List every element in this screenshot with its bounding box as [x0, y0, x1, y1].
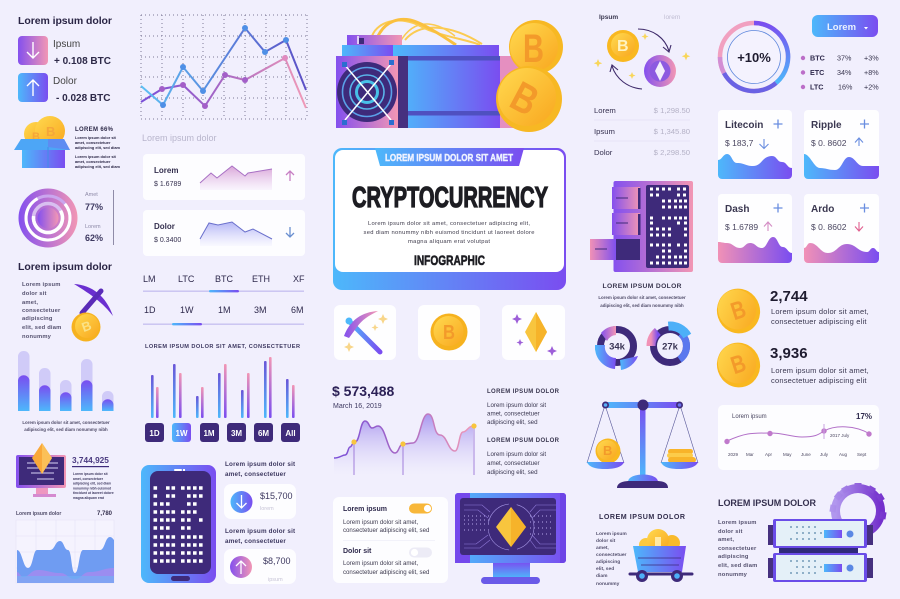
wires — [372, 21, 482, 45]
text: dolor value — [53, 76, 110, 104]
text block: server section: dolor sit — [718, 529, 743, 535]
text block: cart description — [596, 531, 627, 587]
heading: gray subtitle: Lorem ipsum dolor — [142, 133, 217, 143]
panel: toggles: Dolor sit — [343, 548, 372, 555]
subtitle: INFOGRAPHIC — [414, 252, 485, 268]
buttons: range selector: 6M — [258, 429, 269, 438]
text block: mining description: amet, — [22, 300, 38, 306]
text block: lorem 66%: LOREM 66% — [75, 127, 114, 133]
text block: right of value chart: amet, consectetuer — [487, 410, 540, 418]
icon: exchange diagram: B — [617, 38, 629, 55]
illustration: mining rig with coins — [336, 19, 563, 132]
icon: open box with coins: B — [32, 131, 40, 143]
icon: exchange diagram — [594, 29, 690, 89]
panel: toggles: consectetuer adipiscing elit, sed — [343, 527, 429, 534]
text block: cart description: diam — [596, 573, 608, 579]
text: phone note one: Lorem ipsum dolor sit — [225, 461, 296, 468]
tabs: currencies: LTC — [178, 274, 195, 284]
text block: right of value chart: amet, consectetuer — [487, 460, 540, 467]
main title: CRYPTOCURRENCY — [352, 182, 548, 214]
card: 8,700 — [224, 549, 296, 584]
labels: exchange: lorem — [664, 14, 680, 21]
button: lorem dropdown — [812, 15, 878, 37]
text block: right of value chart: LOREM IPSUM DOLOR — [487, 389, 560, 395]
icon: gear — [830, 483, 886, 534]
card: 15,700: $15,700 — [260, 491, 293, 501]
stat: 3,744,925: magna aliquam erat — [73, 496, 105, 500]
button: lorem dropdown: Lorem — [827, 22, 856, 33]
card: timeline chart: July — [820, 452, 829, 457]
series: blue line — [141, 25, 306, 108]
stat: 3,744,925 — [72, 455, 114, 500]
chart: concentric ring gauge — [17, 187, 79, 249]
tabs: timeframes: 6M — [291, 305, 304, 315]
card: litecoin: $ 183,7 — [725, 138, 754, 148]
text block: right of value chart: Lorem ipsum dolor sit — [487, 402, 546, 409]
text block: right of value chart: Lorem ipsum dolor sit — [487, 451, 546, 458]
text block: server section: amet, — [718, 537, 734, 543]
illustration: server stack — [768, 519, 873, 582]
server unit bottom — [773, 553, 867, 582]
text block: cart description: nonummy — [596, 582, 620, 587]
card: dash: $ 1.6789 — [725, 222, 758, 232]
chart: donut 27k — [651, 326, 687, 362]
legend: coin shares: BTC — [810, 54, 825, 62]
panel: BTC balance rows — [18, 36, 111, 104]
toggle on — [409, 504, 432, 514]
text block: server section: adipiscing — [718, 554, 749, 560]
stat: 3,744,925: tincidunt ut laoreet dolore — [73, 491, 114, 495]
legend: coin shares: 16% — [838, 82, 853, 92]
icon: tilted coin: B — [727, 349, 749, 380]
bar chart: capsule bars — [18, 351, 114, 411]
legend: coin shares: ETC — [810, 68, 824, 77]
icon: pickaxe with coin — [72, 284, 113, 342]
table: prices: Ipsum — [594, 127, 615, 136]
text: gauge percentages: Lorem — [85, 224, 101, 230]
card: litecoin — [718, 110, 792, 179]
card: timeline chart: 2017 July — [830, 433, 850, 438]
tabs: currencies: XF — [293, 274, 305, 284]
card: timeline chart: Mar — [746, 452, 754, 457]
text: phone note two — [225, 528, 296, 545]
text block: lorem 66% — [75, 127, 121, 169]
icon tile: coin — [418, 305, 480, 360]
text block: right of value chart — [487, 389, 560, 476]
text block: server section: elit, sed diam — [718, 563, 758, 569]
tabs: timeframes — [143, 305, 304, 325]
card: ripple: Ripple — [811, 120, 842, 131]
coin stat: 3,936: 3,936 — [770, 345, 808, 362]
tabs: timeframes: 1M — [218, 305, 231, 315]
text block: server section: consectetuer — [718, 546, 757, 552]
table: prices: $ 1,345.80 — [654, 127, 690, 136]
panel: toggles: Lorem ipsum dolor sit amet, — [343, 560, 418, 567]
panel: toggles: Lorem ipsum dolor sit amet, — [343, 519, 418, 526]
card: timeline chart: June — [801, 452, 811, 457]
chart: area chart 7,780: 7,780 — [97, 511, 113, 517]
text: dolor value: Dolor — [53, 76, 78, 87]
coin stat: 2,744: 2,744 — [770, 288, 808, 305]
text block: server caption: Lorem ipsum dolor sit amet, consectetuer — [598, 295, 686, 300]
buttons: range selector: 1W — [176, 429, 188, 438]
card: ripple — [804, 110, 879, 179]
buttons: range selector: All — [285, 429, 296, 438]
text: bar chart caption: Lorem ipsum dolor sit amet, consectetuer — [22, 420, 110, 425]
circuit traces — [464, 504, 556, 550]
text block: lorem 66%: Lorem ipsum dolor sit — [75, 135, 117, 140]
icon tile: coin: B — [443, 322, 455, 344]
stat: total value — [332, 383, 394, 410]
coin: front: B — [503, 72, 546, 125]
coin stat: 3,936 — [711, 337, 869, 393]
tabs: timeframes: 1W — [180, 305, 194, 315]
table: prices: $ 2,298.50 — [654, 148, 690, 157]
toggle off — [409, 548, 432, 558]
chart: donut 34k — [595, 326, 638, 370]
coin: front — [496, 66, 562, 132]
legend: coin shares: 34% — [837, 68, 852, 77]
text block: right of value chart: adipiscing elit, sed — [487, 469, 538, 476]
labels: exchange — [599, 14, 680, 21]
card: timeline chart: Sept — [857, 452, 867, 457]
text block: mining description: consectetuer — [22, 308, 61, 314]
card: 8,700: $8,700 — [263, 556, 291, 566]
text block: server caption — [598, 283, 686, 308]
card: dolor sparkline: $ 0.3400 — [154, 237, 181, 244]
legend: coin shares: 37% — [837, 54, 852, 62]
legend: coin shares: +2% — [864, 82, 879, 92]
buttons: range selector: 3M — [231, 429, 242, 438]
coin stat: 2,744: consectetuer adipiscing elit — [771, 317, 867, 326]
text block: mining description: elit, sed diam — [22, 325, 62, 331]
card: 15,700 — [224, 484, 296, 519]
text block: server section: Lorem ipsum — [718, 520, 757, 526]
bar chart: paired thin bars — [151, 357, 295, 418]
tabs: currencies — [143, 274, 305, 292]
text: ipsum value: Ipsum — [53, 39, 80, 50]
text block: server section — [718, 520, 758, 578]
table: prices: Lorem — [594, 106, 616, 115]
text block: lorem 66%: Lorem ipsum dolor sit — [75, 154, 117, 159]
icon: down arrow tile — [18, 36, 48, 65]
card: dash — [718, 194, 792, 263]
text block: right of value chart: adipiscing elit, sed — [487, 419, 538, 426]
card: 8,700: ipsum — [268, 577, 283, 583]
illustration: balance scale — [587, 400, 698, 488]
card: dolor sparkline — [143, 210, 305, 256]
chart: value area chart — [334, 414, 477, 475]
stat: 3,744,925: 3,744,925 — [72, 455, 109, 465]
text: phone note one — [225, 461, 296, 478]
text block: server caption: adipiscing elit, sed diam nonummy nibh — [600, 303, 684, 308]
coin stat: 2,744 — [711, 283, 869, 339]
icon: phone with pixel grid — [141, 465, 216, 583]
table: prices: $ 1,298.50 — [654, 106, 690, 115]
text: ipsum value — [53, 39, 111, 67]
text block: lorem 66%: adipiscing elit, sed diam — [75, 164, 121, 169]
text block: mining description: nonummy — [22, 334, 52, 340]
card: dolor sparkline: Dolor — [154, 222, 175, 231]
text: phone note one: amet, consectetuer — [225, 471, 286, 478]
text: ipsum value: + 0.108 BTC — [54, 56, 111, 67]
description: magna aliquam erat volutpat — [408, 239, 490, 245]
card: timeline chart: 17% — [856, 412, 872, 421]
text: gauge percentages: 62% — [85, 233, 103, 243]
text: dolor value: - 0.028 BTC — [56, 93, 110, 104]
icon: monitor with diamond — [16, 443, 66, 497]
heading: mining: Lorem ipsum dolor — [18, 261, 112, 273]
text block: cart description: elit, sed — [596, 566, 614, 572]
coin stat: 3,936: Lorem ipsum dolor sit amet, — [771, 366, 869, 375]
text block: mining description: adipiscing — [22, 316, 53, 322]
icon: tilted coin — [711, 283, 766, 339]
top box — [347, 35, 402, 45]
tabs: currencies: ETH — [252, 274, 270, 284]
icon: mine cart with coins — [630, 529, 692, 582]
text block: lorem 66%: amet, consectetuer — [75, 140, 111, 145]
card: timeline chart — [718, 405, 879, 470]
card: timeline chart: 2029 — [728, 452, 739, 457]
text block: server section: nonummy — [718, 572, 748, 578]
card: ardo — [804, 194, 879, 263]
icon: tilted coin: B — [727, 295, 749, 326]
main body — [336, 45, 520, 128]
banner ribbon: LOREM IPSUM DOLOR SIT AMET — [385, 153, 513, 164]
card: litecoin: Litecoin — [725, 120, 763, 131]
icon tile: pickaxe — [334, 305, 396, 360]
stat: total value: March 16, 2019 — [333, 403, 382, 410]
icon: pickaxe with coin: B — [80, 318, 93, 335]
buttons: range selector: 1M — [203, 429, 215, 438]
tabs: currencies: LM — [143, 274, 156, 284]
legend: coin shares: +8% — [864, 68, 879, 77]
text: gauge percentages — [85, 190, 114, 245]
stat: 3,744,925: adipiscing elit, sed diam — [73, 482, 111, 486]
tabs: timeframes: 3M — [254, 305, 267, 315]
ring gauge: +10% — [720, 23, 788, 91]
icon tile: diamond — [502, 305, 565, 360]
coin: top — [509, 20, 563, 74]
text block: cart description: amet, — [596, 545, 609, 551]
text: phone note two: Lorem ipsum dolor sit — [225, 528, 296, 535]
ring gauge: +10%: +10% — [737, 50, 771, 65]
icon: open box with coins: B — [46, 124, 55, 139]
chart: donut 34k: 34k — [609, 342, 626, 352]
legend: coin shares — [801, 54, 879, 92]
text block: server caption: LOREM IPSUM DOLOR — [602, 283, 682, 290]
legend: coin shares: LTC — [810, 82, 823, 92]
card: lorem sparkline: $ 1.6789 — [154, 181, 181, 188]
text: gauge percentages: Amet — [85, 192, 98, 198]
icon: tilted coin — [711, 337, 766, 393]
card: timeline chart: Aug — [839, 452, 848, 457]
heading: paired bars: LOREM IPSUM DOLOR SIT AMET, CONSECTETUER — [145, 344, 300, 350]
illustration: server cabinet — [590, 181, 693, 272]
left pan coin: B — [603, 443, 612, 458]
tabs: timeframes: 1D — [144, 305, 156, 315]
card: timeline chart: May — [783, 452, 792, 457]
icon: open box with coins — [14, 116, 70, 168]
table: prices — [594, 106, 690, 157]
card: ripple: $ 0. 8602 — [811, 138, 847, 148]
panel: toggles: Lorem ipsum — [343, 506, 387, 513]
banner ribbon — [375, 148, 524, 166]
text block: cart description: Lorem ipsum — [596, 531, 627, 537]
card: dash: Dash — [725, 204, 749, 215]
text: phone note two: amet, consectetuer — [225, 538, 286, 545]
text block: mining description: Lorem ipsum — [22, 282, 61, 288]
text block: mining description — [22, 282, 62, 340]
text block: cart description: adipiscing — [596, 559, 620, 565]
card: lorem sparkline — [143, 154, 305, 200]
stat: 3,744,925: Lorem ipsum dolor sit — [73, 472, 109, 476]
fan — [337, 60, 397, 125]
stat: total value: $ 573,488 — [332, 383, 394, 399]
right pan coins — [667, 449, 696, 463]
server unit top — [773, 519, 867, 548]
series: pink line — [141, 55, 306, 109]
coin: top: B — [523, 27, 544, 71]
text block: right of value chart: LOREM IPSUM DOLOR — [487, 438, 560, 444]
chart: area chart 7,780 — [16, 511, 114, 583]
icon: up arrow tile — [18, 73, 48, 102]
card: ardo: Ardo — [811, 204, 834, 215]
description: sed diam nonummy nibh euismod tincidunt ut laoreet dolore — [364, 230, 534, 236]
stat: 3,744,925: amet, consectetuer — [73, 477, 104, 481]
illustration: monitor with diamond — [455, 493, 566, 584]
description — [364, 221, 534, 245]
tabs: currencies: BTC — [215, 274, 234, 284]
card: 15,700: lorem — [260, 506, 274, 512]
chart: area chart 7,780: Lorem ipsum dolor — [16, 511, 61, 517]
description: Lorem ipsum dolor sit amet, consectetuer adipiscing elit, — [368, 221, 530, 227]
panel: title card — [333, 148, 566, 290]
panel: toggles: consectetuer adipiscing elit, sed — [343, 569, 429, 576]
legend: coin shares: +3% — [864, 54, 879, 62]
card: timeline chart: Lorem ipsum — [732, 414, 767, 420]
card: lorem sparkline: Lorem — [154, 166, 178, 175]
table: prices: Dolor — [594, 148, 613, 157]
text: bar chart caption — [22, 420, 110, 432]
chart: dotted line chart — [141, 15, 307, 119]
heading: cart: LOREM IPSUM DOLOR — [599, 513, 685, 521]
labels: exchange: Ipsum — [599, 14, 618, 21]
card: timeline chart: Apr — [765, 452, 773, 457]
panel: toggles — [333, 497, 448, 583]
text block: cart description: dolor sit — [596, 538, 616, 544]
buttons: range selector — [145, 423, 300, 442]
stat: 3,744,925: nonummy nibh euismod — [73, 486, 111, 490]
coin stat: 3,936: consectetuer adipiscing elit — [771, 376, 867, 385]
text block: lorem 66%: amet, consectetuer — [75, 159, 111, 164]
text block: lorem 66%: adipiscing elit, sed diam — [75, 145, 121, 150]
chart: donut 27k: 27k — [662, 342, 679, 352]
text block: mining description: dolor sit — [22, 291, 47, 297]
heading: server section: LOREM IPSUM DOLOR — [718, 498, 816, 508]
text block: cart description: consectetuer — [596, 552, 627, 558]
text: bar chart caption: adipiscing elit, sed diam nonummy nibh — [24, 427, 108, 432]
coin stat: 2,744: Lorem ipsum dolor sit amet, — [771, 307, 869, 316]
buttons: range selector: 1D — [149, 429, 160, 438]
heading: top left balance: Lorem ipsum dolor — [18, 15, 112, 27]
text: gauge percentages: 77% — [85, 202, 103, 212]
card: ardo: $ 0. 8602 — [811, 222, 847, 232]
